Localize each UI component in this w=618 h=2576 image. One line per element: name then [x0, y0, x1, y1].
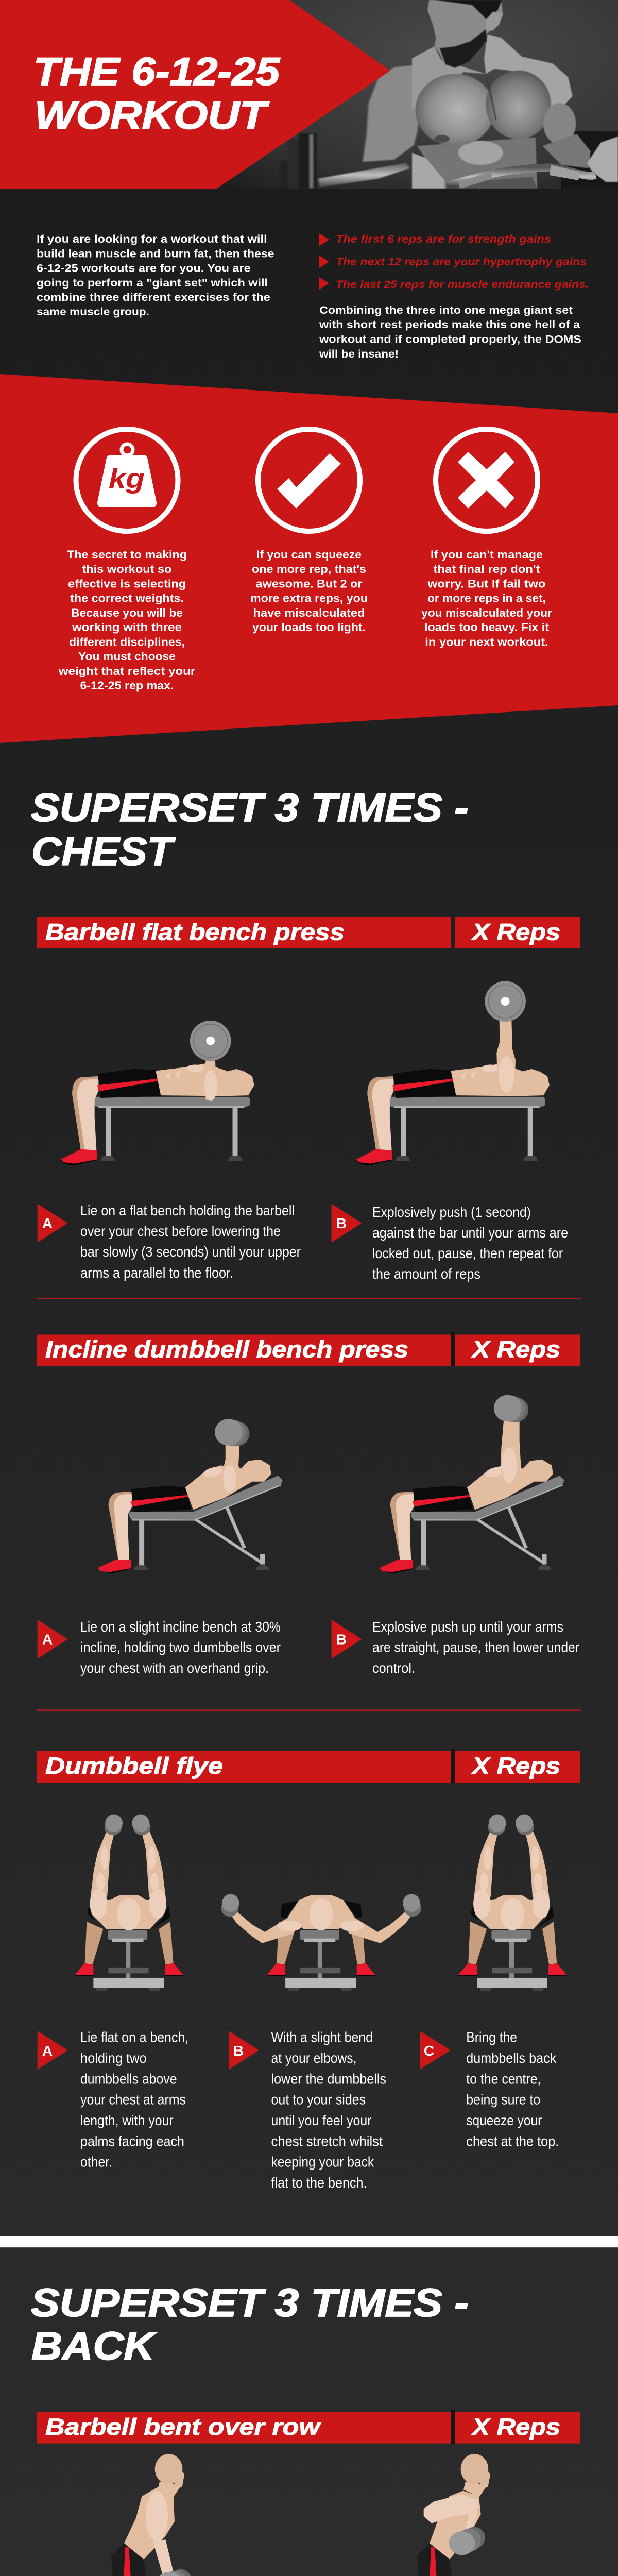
step B: the amount of reps — [372, 1266, 480, 1282]
text: failed reps: loads too heavy. Fix it — [424, 621, 550, 634]
text: secret to weights: the correct weights. — [70, 591, 184, 605]
icon: check mark — [258, 429, 360, 531]
illustration: bent over row top — [417, 2454, 490, 2576]
rep goal bullet list: The last 25 reps for muscle endurance gains. — [336, 279, 589, 291]
reps bar — [455, 2412, 580, 2444]
reps bar: X Reps — [471, 2414, 560, 2440]
step A: dumbbells above — [80, 2071, 177, 2087]
panel: barbell bent over row — [37, 2410, 580, 2576]
illustration: incline press top — [380, 1395, 564, 1573]
step B — [332, 1619, 579, 1676]
step A — [38, 2029, 188, 2170]
text: extra reps: have miscalculated — [253, 606, 365, 619]
intro paragraph: build lean muscle and burn fat, then these — [37, 248, 274, 260]
step A: over your chest before lowering the — [80, 1223, 281, 1239]
step B: lower the dumbbells — [271, 2071, 386, 2087]
title — [33, 50, 281, 138]
heading: superset back — [31, 2281, 469, 2368]
reps bar: X Reps — [471, 1336, 560, 1363]
panel: dumbbell flye — [37, 1749, 580, 2191]
exercise title bar: Incline dumbbell bench press — [45, 1336, 408, 1363]
panel: incline dumbbell bench press — [37, 1332, 580, 1676]
title: THE 6-12-25 — [33, 50, 281, 94]
heading: superset chest: CHEST — [31, 829, 176, 874]
text: extra reps: one more rep, that's — [252, 563, 366, 575]
step A: Lie on a flat bench holding the barbell — [80, 1202, 295, 1218]
illustration: bent over row start — [111, 2454, 192, 2576]
step B: are straight, pause, then lower under — [372, 1639, 579, 1655]
step B: control. — [372, 1660, 415, 1676]
reps bar: X Reps — [471, 919, 560, 945]
text: failed reps: that final rep don't — [434, 563, 540, 575]
step C: being sure to — [466, 2092, 540, 2108]
panel: barbell flat bench press — [37, 917, 580, 1282]
reps bar — [455, 1334, 580, 1366]
step B: at your elbows, — [271, 2050, 356, 2066]
text: secret to weights — [58, 548, 196, 692]
step B: locked out, pause, then repeat for — [372, 1245, 563, 1261]
step A: A — [42, 1215, 53, 1231]
text: secret to weights: different disciplines, — [69, 636, 185, 648]
text: failed reps: If you can't manage — [431, 548, 543, 561]
title: WORKOUT — [35, 94, 269, 138]
text: secret to weights: You must choose — [78, 650, 176, 663]
combining paragraph: with short rest periods make this one hell of a — [319, 319, 580, 331]
text: failed reps: worry. But If fail two — [427, 577, 546, 590]
exercise title bar — [37, 917, 451, 948]
illustration: bench press start — [61, 1021, 254, 1165]
heading: superset back: SUPERSET 3 TIMES - — [31, 2281, 469, 2325]
step B: Explosively push (1 second) — [372, 1204, 531, 1220]
combining paragraph — [319, 304, 581, 360]
step B: keeping your back — [271, 2154, 374, 2170]
text: secret to weights: this workout so — [82, 563, 172, 575]
text: secret to weights: working with three — [72, 621, 182, 634]
step A: your chest at arms — [80, 2092, 186, 2108]
heading: superset chest — [31, 786, 469, 874]
step B: With a slight bend — [271, 2029, 373, 2045]
text: failed reps: in your next workout. — [425, 636, 548, 648]
exercise title bar: Barbell bent over row — [45, 2414, 321, 2440]
exercise title bar — [37, 1751, 451, 1783]
step B — [229, 2029, 386, 2191]
text: secret to weights: The secret to making — [67, 548, 187, 561]
hero photo: bodybuilder with curl bar — [206, 0, 618, 189]
combining paragraph: will be insane! — [319, 348, 399, 360]
step C — [420, 2029, 559, 2149]
rep goal bullet list: The first 6 reps are for strength gains — [336, 233, 551, 245]
combining paragraph: workout and if completed properly, the DOMS — [319, 334, 581, 345]
panel: red tips band — [0, 374, 618, 743]
step A: bar slowly (3 seconds) until your upper — [80, 1244, 301, 1260]
text: extra reps — [250, 548, 368, 634]
intro paragraph: If you are looking for a workout that will — [37, 233, 267, 245]
step A: Lie flat on a bench, — [80, 2029, 188, 2045]
illustration: incline press start — [98, 1419, 283, 1573]
step C: dumbbells back — [466, 2050, 557, 2066]
step B: out to your sides — [271, 2092, 366, 2108]
step A: A — [42, 2043, 53, 2059]
step C: to the centre, — [466, 2071, 541, 2087]
step A: Lie on a slight incline bench at 30% — [80, 1619, 281, 1635]
intro paragraph: going to perform a "giant set" which will — [37, 277, 268, 289]
step A — [38, 1619, 281, 1676]
intro paragraph: combine three different exercises for the — [37, 292, 270, 303]
step A: A — [42, 1631, 53, 1648]
intro paragraph — [37, 233, 274, 318]
step C: Bring the — [466, 2029, 517, 2045]
step A: arms a parallel to the floor. — [80, 1265, 233, 1281]
icon: kg weight — [76, 429, 178, 531]
text: extra reps: more extra reps, you — [250, 591, 368, 605]
step B: B — [233, 2043, 244, 2059]
step B: chest stretch whilst — [271, 2133, 383, 2149]
intro paragraph: same muscle group. — [37, 306, 149, 318]
step B: Explosive push up until your arms — [372, 1619, 563, 1635]
heading: superset chest: SUPERSET 3 TIMES - — [31, 786, 469, 830]
step C: C — [424, 2043, 434, 2059]
step C: chest at the top. — [466, 2133, 559, 2149]
rep goal bullet list — [319, 233, 589, 291]
hero banner — [0, 0, 618, 189]
step A: your chest with an overhand grip. — [80, 1660, 269, 1676]
step B — [332, 1204, 568, 1282]
step B: until you feel your — [271, 2112, 372, 2128]
text: extra reps: awesome. But 2 or — [255, 577, 363, 590]
combining paragraph: Combining the three into one mega giant set — [319, 304, 573, 316]
text: secret to weights: weight that reflect your — [58, 665, 196, 677]
intro paragraph: 6-12-25 workouts are for you. You are — [37, 263, 251, 274]
step A: holding two — [80, 2050, 147, 2066]
icon: kg weight: kg — [109, 463, 145, 494]
exercise title bar: Barbell flat bench press — [45, 919, 345, 945]
reps bar — [455, 917, 580, 948]
text: extra reps: your loads too light. — [252, 621, 366, 634]
step A: length, with your — [80, 2112, 174, 2128]
rep goal bullet list: The next 12 reps are your hypertrophy gains — [336, 256, 587, 268]
step A: incline, holding two dumbbells over — [80, 1639, 281, 1655]
text: secret to weights: 6-12-25 rep max. — [80, 679, 174, 692]
illustration: flye arms up — [75, 1815, 183, 1991]
step A: palms facing each — [80, 2133, 184, 2149]
text: failed reps — [421, 548, 552, 648]
illustration: flye arms out — [221, 1894, 421, 1991]
step B: flat to the bench. — [271, 2175, 367, 2191]
reps bar: X Reps — [471, 1753, 560, 1779]
step A: other. — [80, 2154, 112, 2170]
heading: superset back: BACK — [31, 2324, 158, 2368]
reps bar — [455, 1751, 580, 1783]
step C: squeeze your — [466, 2112, 542, 2128]
text: secret to weights: Because you will be — [71, 606, 183, 619]
text: secret to weights: effective is selecting — [68, 577, 186, 590]
text: failed reps: you miscalculated your — [421, 606, 552, 619]
illustration: flye arms together — [458, 1815, 567, 1991]
icon: cross mark — [436, 429, 538, 531]
text: extra reps: If you can squeeze — [256, 548, 362, 561]
step B: B — [336, 1631, 347, 1648]
exercise title bar: Dumbbell flye — [45, 1753, 223, 1779]
exercise title bar — [37, 1334, 451, 1366]
step A — [38, 1202, 301, 1281]
step B: against the bar until your arms are — [372, 1225, 568, 1241]
text: failed reps: or more reps in a set, — [427, 591, 546, 605]
illustration: bench press top — [356, 981, 550, 1165]
step B: B — [336, 1215, 347, 1231]
hero red arrow panel — [0, 0, 390, 189]
exercise title bar — [37, 2412, 451, 2444]
